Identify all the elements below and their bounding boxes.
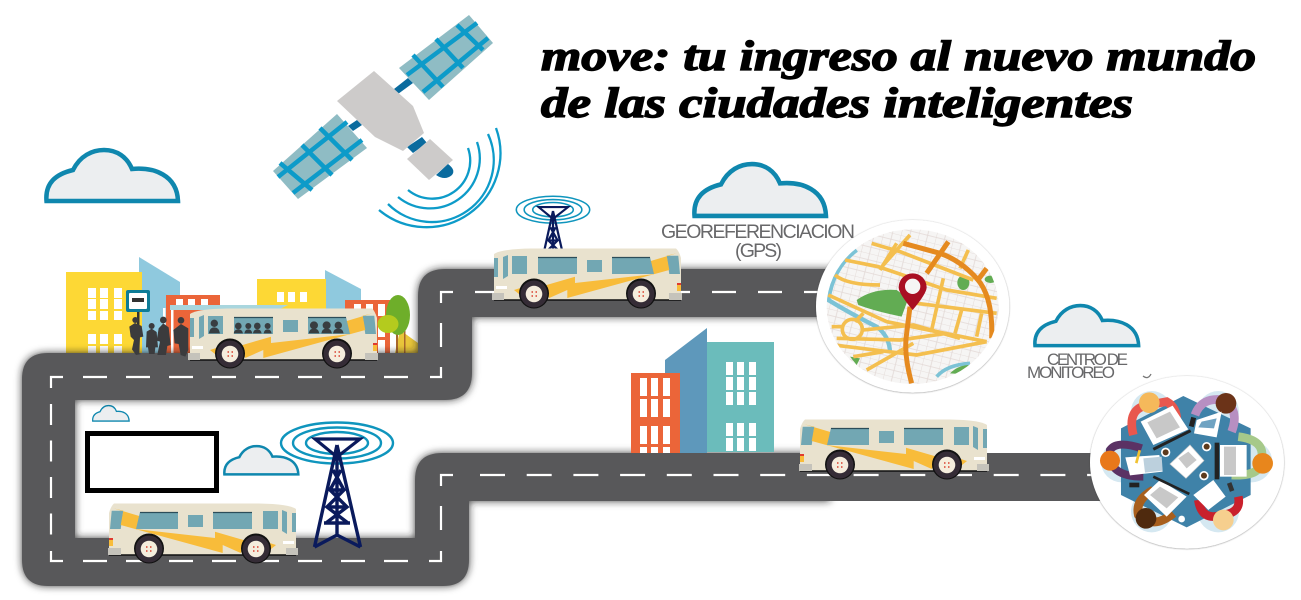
label: georeferenciacion: GEOREFERENCIACION (661, 221, 855, 243)
person: purple (1189, 393, 1236, 437)
empty framed box (88, 434, 216, 490)
label: centro de monitoreo: CENTRO DE (1047, 350, 1128, 369)
map circle (816, 220, 1009, 393)
person: violet (1100, 445, 1163, 487)
label: georeferenciacion: (GPS) (735, 240, 782, 262)
label: georeferenciacion (661, 221, 855, 262)
buildings: left city block (66, 257, 418, 353)
title: de las ciudades inteligentes (541, 81, 1133, 127)
halo seats (1101, 391, 1272, 532)
cloud: beside tower (224, 446, 298, 474)
person: crimson (1193, 480, 1239, 530)
small arc beside label (1143, 374, 1151, 378)
cloud: GPS (694, 164, 826, 216)
label: centro de monitoreo: MONITOREO (1027, 363, 1115, 382)
title (541, 34, 1256, 127)
centre papers and coffee (1161, 442, 1211, 522)
person: brown (1136, 477, 1189, 529)
person: green (1215, 437, 1273, 479)
road lane markings (51, 292, 1110, 561)
cloud: top left (46, 150, 178, 201)
bus: at the stop with passengers (188, 308, 378, 368)
cloud: small (93, 406, 129, 421)
icon: satellite (273, 15, 500, 227)
person: red (1132, 392, 1191, 449)
bus: lower road (108, 504, 298, 564)
title: move: tu ingreso al nuevo mundo (541, 34, 1256, 80)
people waiting at the stop (129, 317, 188, 357)
tower: lower left (281, 422, 393, 547)
bus: upper road (492, 248, 682, 308)
buildings: central block (631, 328, 774, 453)
road: east section (825, 453, 1110, 501)
cloud: monitoring centre (1035, 306, 1139, 346)
road (22, 269, 840, 586)
bus stop shelter and sign (126, 290, 288, 358)
bus: central road (799, 420, 989, 480)
table (1121, 396, 1251, 527)
label: centro de monitoreo (1027, 350, 1128, 382)
tower: on upper road (516, 196, 590, 278)
monitoring centre circle (1090, 376, 1284, 549)
